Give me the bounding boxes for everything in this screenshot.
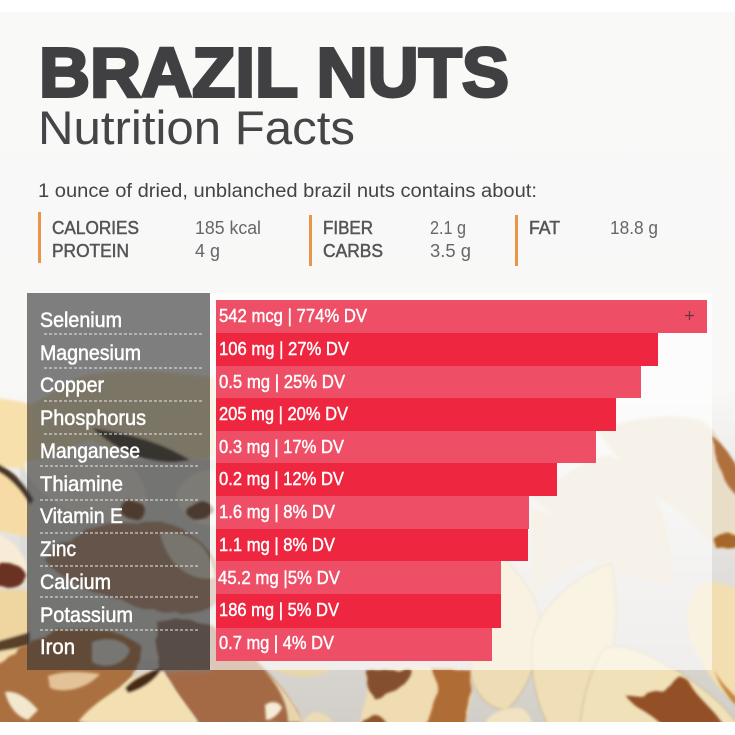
upper right large nut [598, 416, 735, 547]
bar chart: nutrient daily values: 186 mg | 5% DV [219, 600, 339, 620]
small nut [531, 509, 584, 570]
bar chart: nutrient daily values: 0.5 mg | 25% DV [219, 372, 345, 392]
grey gap behind left nuts [18, 458, 186, 642]
background photo of brazil nuts [0, 370, 735, 722]
stats group: calories and protein: CALORIES [52, 218, 139, 238]
nutrient names: Copper [40, 374, 104, 397]
nutrient names: Calcium [40, 571, 111, 594]
stats group: fat: FAT [529, 218, 560, 238]
bottom right nut [580, 646, 735, 725]
nutrient names: Selenium [40, 309, 122, 332]
grey nutrient labels panel [27, 293, 210, 670]
stats group: fiber and carbs [309, 215, 471, 266]
mottled brown skins [0, 501, 303, 725]
bar chart: nutrient daily values: 1.1 mg | 8% DV [219, 535, 335, 555]
stats group: calories and protein: PROTEIN [52, 241, 129, 261]
stats group: calories and protein [38, 212, 261, 263]
bar chart: nutrient daily values: 106 mg | 27% DV [219, 339, 349, 359]
nutrient names [40, 309, 146, 659]
middle large nut [532, 456, 670, 570]
stats group: fiber and carbs: CARBS [323, 241, 383, 261]
small bottom nut [485, 707, 532, 722]
stats group: fat [515, 215, 658, 266]
bar chart: nutrient daily values [216, 300, 707, 661]
bar chart: nutrient daily values: 0.7 mg | 4% DV [219, 633, 334, 653]
upper-left tan nut [30, 371, 215, 465]
bar chart: nutrient daily values: 45.2 mg |5% DV [218, 568, 340, 588]
nutrient names: Potassium [40, 604, 133, 627]
cream wedge nut [78, 671, 198, 722]
right cream nut F [687, 583, 735, 705]
nutrient names: Magnesium [40, 342, 141, 365]
translucent white panel behind bars [210, 293, 712, 670]
stats group: calories and protein: 185 kcal [195, 218, 261, 238]
stats group: fat: 18.8 g [610, 218, 658, 238]
bar chart: nutrient daily values: 542 mcg | 774% DV [219, 306, 367, 326]
pale highlights on brown nuts [160, 533, 215, 579]
left cream nut stack [0, 468, 30, 537]
stats group: calories and protein: 4 g [195, 241, 220, 261]
nutrient names: Iron [40, 636, 75, 659]
icon: plus [685, 311, 694, 320]
title: BRAZIL NUTS [39, 34, 509, 112]
bar chart: nutrient daily values: 1.6 mg | 8% DV [219, 502, 335, 522]
bar chart: nutrient daily values: 0.2 mg | 12% DV [219, 469, 344, 489]
mid pale nut under panel [24, 460, 40, 474]
tall nut B [532, 563, 616, 725]
nutrient names: Zinc [40, 538, 76, 561]
nut between panels [270, 668, 332, 677]
nutrient names: Manganese [40, 440, 140, 463]
nut E [470, 555, 541, 710]
stats group: fiber and carbs: 2.1 g [430, 218, 466, 238]
subtitle: Nutrition Facts [38, 101, 355, 154]
stats group: fiber and carbs: FIBER [323, 218, 373, 238]
bar chart: nutrient daily values: 205 mg | 20% DV [219, 404, 348, 424]
nutrient names: Vitamin E [40, 505, 123, 528]
bar chart: nutrient daily values: 0.3 mg | 17% DV [219, 437, 344, 457]
nutrient names: Thiamine [40, 473, 123, 496]
serving intro text: 1 ounce of dried, unblanched brazil nuts contains about: [38, 181, 537, 202]
nutrient names: Phosphorus [40, 407, 146, 430]
dashed separators [40, 334, 202, 630]
bottom centre nut [360, 666, 471, 725]
stats group: fiber and carbs: 3.5 g [430, 241, 471, 261]
